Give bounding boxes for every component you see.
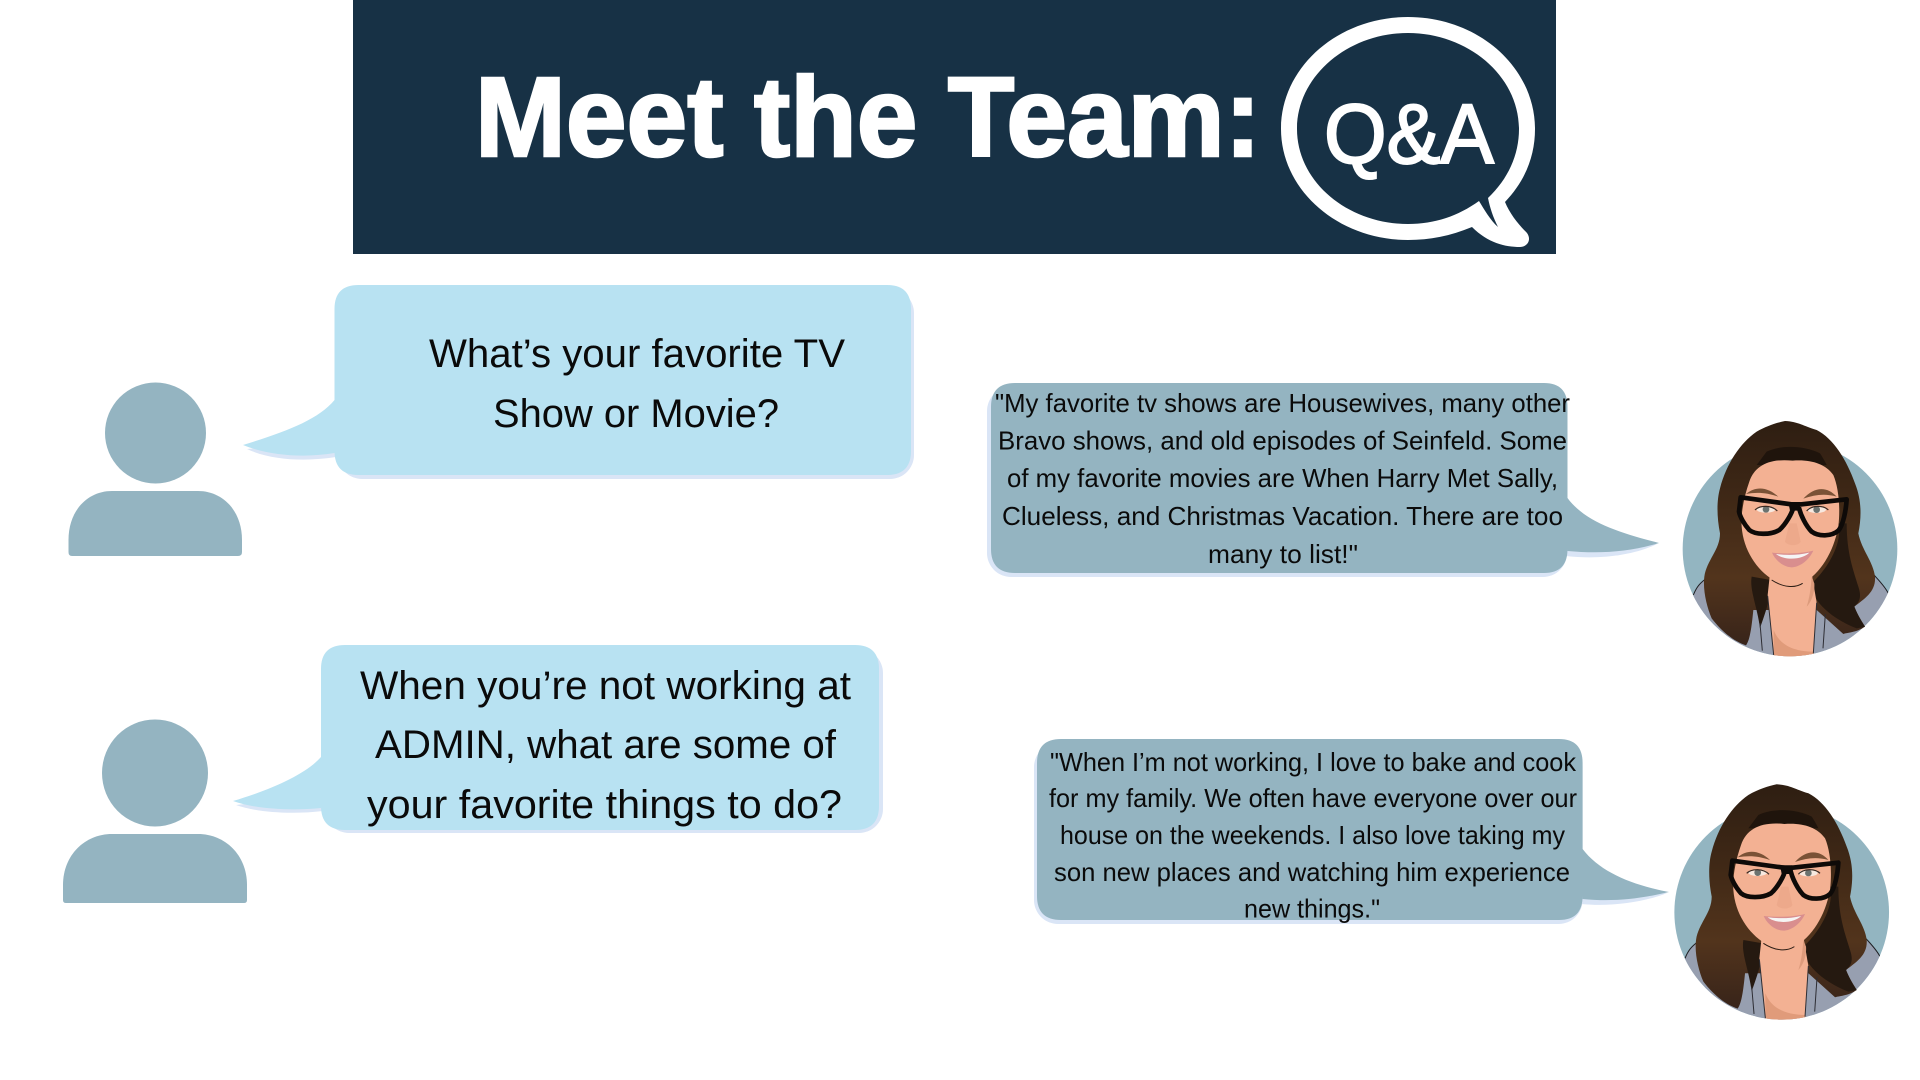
answer text 1: Bravo shows, and old episodes of Seinfeld. Some <box>998 426 1567 456</box>
answer bubble 1 <box>987 383 1659 577</box>
answer text 1: of my favorite movies are When Harry Met Sally, <box>1007 463 1558 493</box>
question text 1: What’s your favorite TV <box>429 332 845 376</box>
answer text 2: new things." <box>1244 894 1380 924</box>
icon: Q&A speech bubble <box>1281 17 1535 247</box>
question bubble 2 <box>233 645 883 833</box>
avatar 2: woman with glasses <box>1674 784 1889 1030</box>
question bubble 1 <box>243 285 914 479</box>
question text 2 <box>360 664 851 827</box>
answer text 1 <box>995 388 1570 569</box>
answer text 2 <box>1049 747 1577 924</box>
icon label: Q&A: Q&A <box>1324 87 1494 181</box>
answer text 1: Clueless, and Christmas Vacation. There are too <box>1002 501 1563 531</box>
header banner <box>353 0 1556 254</box>
question text 2: ADMIN, what are some of <box>375 723 837 767</box>
person icon 1 <box>68 382 242 556</box>
title: Meet the Team: <box>475 54 1261 180</box>
question text 2: your favorite things to do? <box>367 783 842 827</box>
answer text 2: "When I’m not working, I love to bake and cook <box>1050 747 1577 777</box>
question text 2: When you’re not working at <box>360 664 851 708</box>
answer bubble 2 <box>1034 739 1669 924</box>
answer text 2: for my family. We often have everyone over our <box>1049 783 1577 813</box>
answer text 2: house on the weekends. I also love taking my <box>1060 820 1565 850</box>
person icon 2 <box>63 720 247 903</box>
question text 1 <box>429 332 845 436</box>
avatar 1: woman with glasses <box>1683 421 1897 667</box>
answer text 1: many to list!" <box>1208 539 1358 569</box>
answer text 2: son new places and watching him experience <box>1054 857 1570 887</box>
question text 1: Show or Movie? <box>493 392 779 436</box>
answer text 1: "My favorite tv shows are Housewives, many other <box>995 388 1570 418</box>
